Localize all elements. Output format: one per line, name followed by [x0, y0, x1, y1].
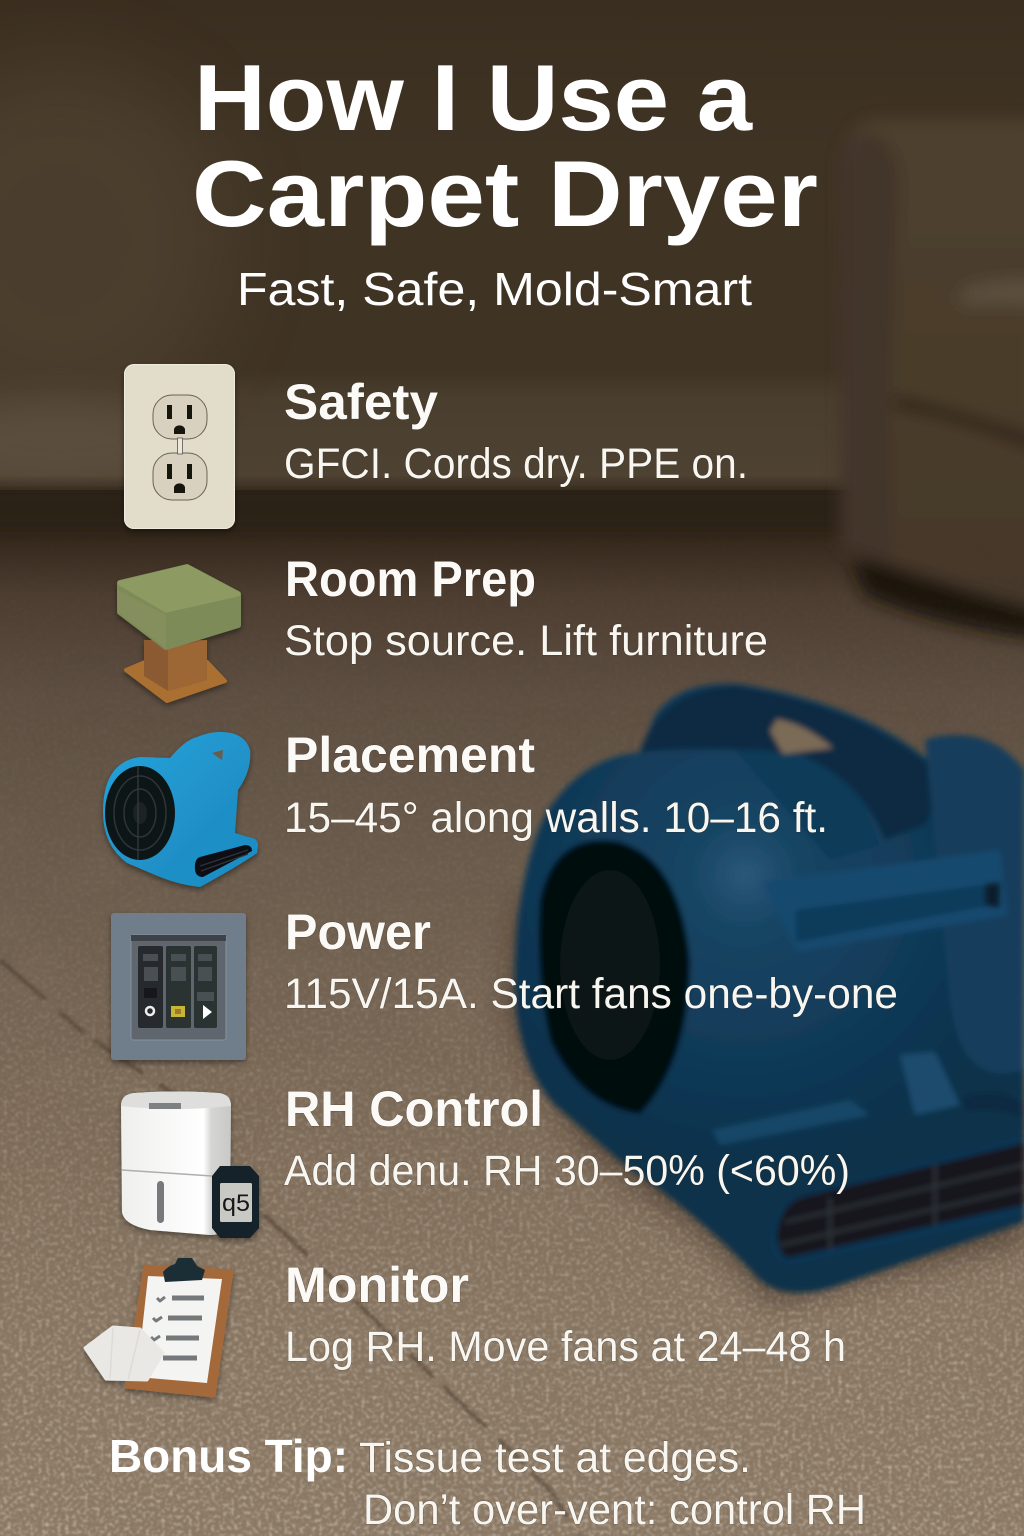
title — [192, 45, 818, 246]
bonus tip — [109, 1430, 866, 1534]
brace — [900, 1052, 960, 1115]
title: Carpet Dryer — [192, 141, 818, 246]
title: How I Use a — [194, 45, 753, 150]
large blurred blue air mover in the background — [510, 684, 1024, 1305]
step 6: monitor — [85, 1257, 846, 1396]
step 5: rh control — [121, 1081, 850, 1238]
text: room prep: Stop source. Lift furniture — [284, 617, 768, 665]
dark grille — [539, 840, 690, 1114]
icon: clipboard and tissue — [85, 1258, 232, 1396]
heading: rh control: RH Control — [285, 1081, 543, 1137]
handle — [640, 686, 938, 840]
heading: safety: Safety — [284, 374, 438, 430]
outlet — [770, 1135, 1024, 1265]
text: placement: 15–45° along walls. 10–16 ft. — [284, 794, 828, 842]
sofa — [840, 120, 1024, 640]
icon: wall outlet — [124, 364, 235, 529]
bonus tip: Bonus Tip: — [109, 1430, 348, 1482]
bonus tip: Don’t over-vent: control RH — [363, 1486, 866, 1534]
text: monitor: Log RH. Move fans at 24–48 h — [285, 1323, 846, 1371]
icon: blue air mover — [103, 732, 258, 887]
step 4: power — [111, 904, 898, 1060]
icon: breaker panel — [111, 913, 246, 1060]
subtitle: Fast, Safe, Mold-Smart — [237, 263, 752, 315]
icon: dehumidifier and hygrometer: q5 — [222, 1190, 250, 1217]
text: safety: GFCI. Cords dry. PPE on. — [284, 440, 748, 488]
side panel — [763, 850, 1007, 952]
carpet seam — [0, 960, 580, 1536]
rear dome — [925, 736, 1024, 1074]
bonus tip: Tissue test at edges. — [359, 1434, 751, 1482]
text: rh control: Add denu. RH 30–50% (<60%) — [284, 1147, 850, 1195]
step 3: placement — [103, 727, 828, 887]
icon: dehumidifier and hygrometer — [121, 1092, 259, 1238]
text: power: 115V/15A. Start fans one-by-one — [284, 970, 898, 1018]
heading: placement: Placement — [285, 727, 535, 783]
step 1: safety — [124, 364, 748, 529]
heading: monitor: Monitor — [285, 1257, 469, 1313]
step 2: room prep — [117, 551, 768, 701]
icon: furniture on block — [117, 567, 238, 701]
heading: power: Power — [285, 904, 431, 960]
carpet noise — [0, 847, 1024, 1536]
heading: room prep: Room Prep — [285, 551, 536, 607]
